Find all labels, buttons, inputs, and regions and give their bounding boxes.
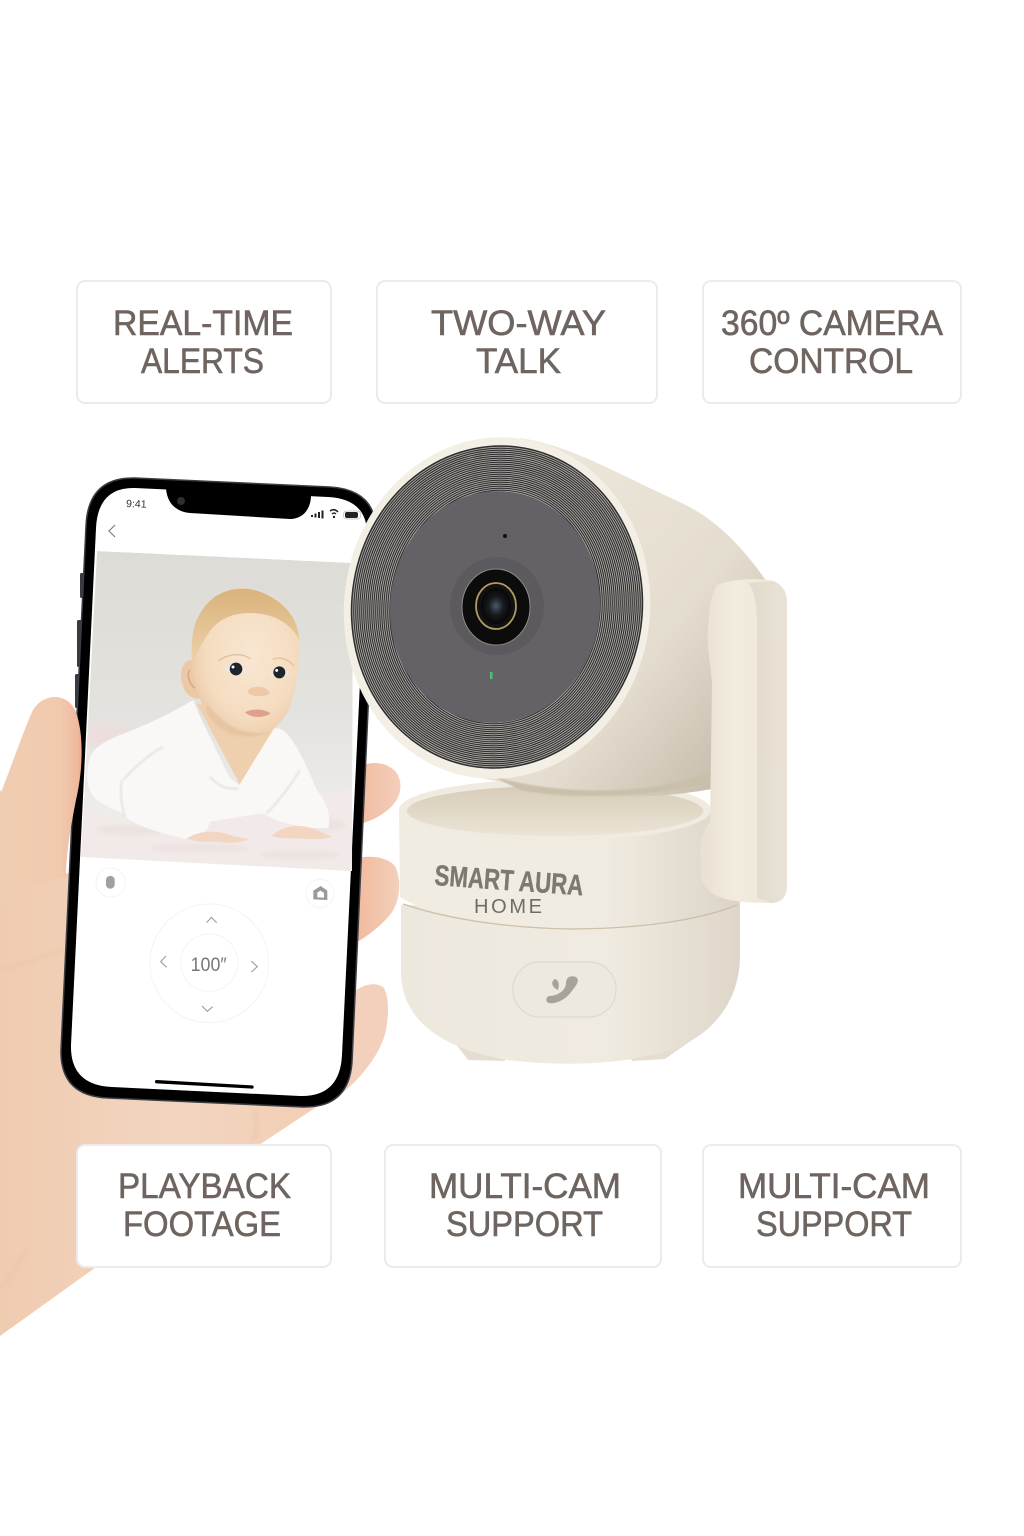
soft pink fold [87, 728, 88, 741]
neck [197, 703, 275, 785]
collar rim [399, 779, 711, 841]
thumb [0, 697, 82, 900]
finger 1 [350, 763, 400, 826]
mouth [245, 709, 271, 717]
concentric grille lines [335, 431, 659, 783]
right hand [272, 826, 332, 839]
finger 2 [350, 857, 399, 946]
home icon [313, 886, 327, 900]
talk button [513, 962, 616, 1017]
microphone dot [503, 534, 507, 538]
lens housing [462, 569, 530, 645]
left hand [187, 832, 248, 843]
feature card: multi-cam support duplicate [703, 1145, 961, 1267]
hair [192, 589, 299, 663]
right eye [270, 666, 289, 678]
feature card: multi-cam support duplicate: SUPPORT [756, 1205, 912, 1244]
base feet [456, 1040, 692, 1061]
feature card: real-time alerts: REAL-TIME [113, 304, 293, 343]
ear inner [188, 670, 195, 688]
speaker grille [332, 428, 662, 786]
feature card: 360 camera control [703, 281, 961, 403]
home indicator [157, 1082, 252, 1087]
lens glass [481, 588, 511, 624]
palm [0, 790, 345, 1336]
onesie [87, 700, 329, 839]
blanket [82, 814, 352, 871]
collar bowl interior [407, 786, 703, 836]
hand holding the phone [0, 763, 400, 1336]
baby [87, 588, 332, 843]
nose [247, 687, 270, 696]
video feed of baby [70, 551, 355, 875]
direction arrows [161, 917, 257, 1011]
palm crease shading [0, 950, 257, 1290]
base [401, 900, 740, 1064]
feature card: multi-cam support duplicate: MULTI-CAM [738, 1167, 930, 1206]
talk icon [546, 976, 578, 1003]
back chevron [109, 525, 115, 537]
direction pad [150, 904, 269, 1023]
feature card: two-way talk [377, 281, 657, 403]
mic icon [106, 876, 115, 889]
feature card: two-way talk: TALK [476, 342, 561, 381]
left control button [96, 868, 125, 897]
app controls [96, 868, 334, 1087]
side buttons [75, 573, 84, 708]
support arm [700, 579, 787, 903]
feature card: multi-cam support: MULTI-CAM [429, 1167, 621, 1206]
left eye [225, 663, 247, 675]
phone frame [61, 478, 376, 1107]
centre dial [181, 934, 238, 991]
status time: 9:41 [126, 498, 147, 511]
camera face rim [324, 420, 670, 796]
photo backdrop [81, 551, 353, 871]
chin shadow [207, 703, 273, 737]
notch [166, 488, 311, 519]
brand name: SMART AURA [434, 860, 584, 902]
smartphone [61, 478, 376, 1107]
onesie shading [121, 747, 300, 817]
blanket texture [115, 828, 148, 832]
right control button [306, 879, 334, 907]
brand sub-name: HOME [474, 896, 542, 918]
feature card: real-time alerts [77, 281, 331, 403]
finger 3 [340, 984, 388, 1095]
brows [218, 655, 294, 666]
camera dot [177, 497, 185, 505]
support arm side face [748, 581, 787, 903]
feature card: two-way talk: TWO-WAY [431, 304, 606, 343]
status icons [311, 510, 360, 519]
feature card: real-time alerts: ALERTS [141, 342, 264, 381]
grey faceplate [377, 479, 613, 735]
feature card: 360 camera control: CONTROL [749, 342, 913, 381]
feature card: 360 camera control: 360º CAMERA [721, 304, 944, 343]
feature card: playback footage [77, 1145, 331, 1267]
gold lens ring [476, 583, 516, 629]
phone screen [71, 488, 367, 1096]
feature card: playback footage: FOOTAGE [123, 1205, 281, 1244]
lens boss [450, 557, 544, 655]
feature card: multi-cam support [385, 1145, 661, 1267]
body underside shadow [490, 772, 712, 796]
head [192, 588, 299, 738]
security camera [324, 420, 787, 1064]
collar seam [403, 904, 737, 929]
duration text: 100″ [191, 955, 227, 976]
camera body [480, 438, 767, 797]
collar band [399, 810, 738, 928]
ear [181, 660, 200, 699]
status LED [490, 672, 492, 679]
feature card: multi-cam support: SUPPORT [446, 1205, 603, 1244]
feature card: playback footage: PLAYBACK [118, 1167, 291, 1206]
